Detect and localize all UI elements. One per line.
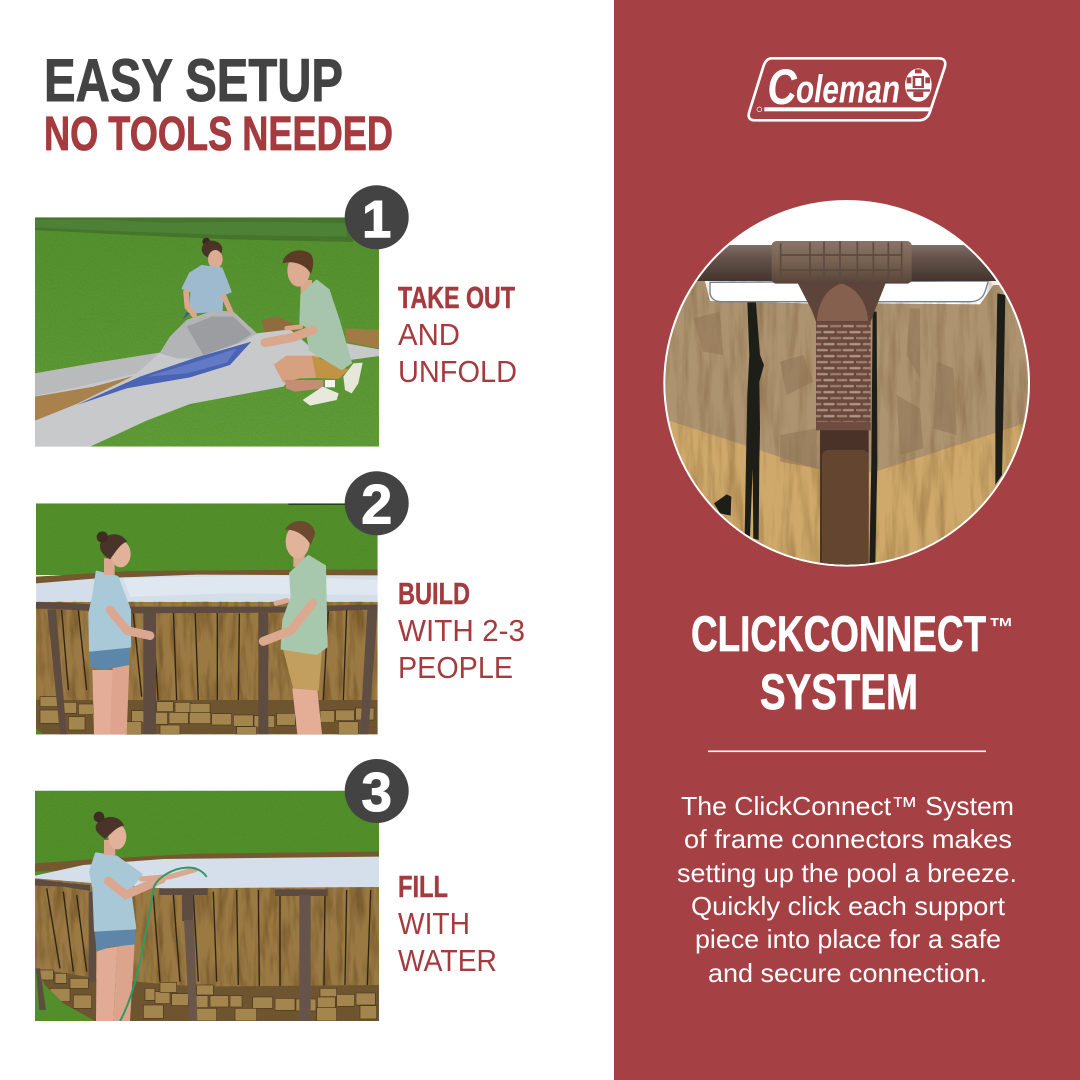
description text: Quickly click each support [691,891,1006,921]
heading: clickconnect system: CLICKCONNECT [691,606,986,662]
badge: 3 [345,759,409,823]
description text: The ClickConnect™ System [681,791,1014,821]
step 1 caption: AND [398,317,460,352]
step 3 caption: FILL [398,869,448,904]
badge: 2 [345,471,409,536]
description text: setting up the pool a breeze. [677,858,1017,888]
step 3 [35,759,497,1021]
step 3 caption: WITH [398,906,470,941]
subtitle: NO TOOLS NEEDED [44,108,393,161]
step 1 caption [398,280,517,389]
step 1 caption: UNFOLD [398,354,517,389]
logo: coleman [749,58,945,120]
badge: 3: 3 [361,761,392,823]
badge: 1: 1 [362,191,391,249]
photo: take out and unfold [35,217,379,447]
step 3 caption [398,869,497,978]
woman [183,238,231,319]
panel: clickconnect [614,0,1080,1080]
photo: build with 2-3 people [36,503,378,734]
step 3 caption: WATER [398,943,497,978]
photo: fill with water [35,791,379,1021]
hose [120,868,207,1021]
description text: and secure connection. [708,958,987,988]
heading: clickconnect system [691,606,1014,720]
step 2 caption [398,576,525,685]
man [263,521,327,734]
circular photo: connector [660,195,1040,575]
heading: clickconnect system: ™ [989,612,1014,642]
step 1 [35,185,517,447]
logo: coleman: C [767,59,797,115]
step 2 caption: BUILD [398,576,470,611]
step 1 caption: TAKE OUT [398,280,515,315]
heading: easy setup [44,47,393,161]
step 2 caption: WITH 2-3 [398,613,525,648]
woman [90,812,195,1021]
man [265,250,363,406]
description text [677,791,1017,988]
description text: of frame connectors makes [684,824,1012,854]
heading: clickconnect system: SYSTEM [760,664,918,720]
step 2 caption: PEOPLE [398,650,513,685]
title: EASY SETUP [44,47,343,114]
step 2 [36,471,525,734]
badge: 2: 2 [361,472,392,536]
woman [89,531,150,734]
logo: coleman: oleman [796,67,900,111]
badge: 1 [345,185,409,249]
description text: piece into place for a safe [695,924,1001,954]
